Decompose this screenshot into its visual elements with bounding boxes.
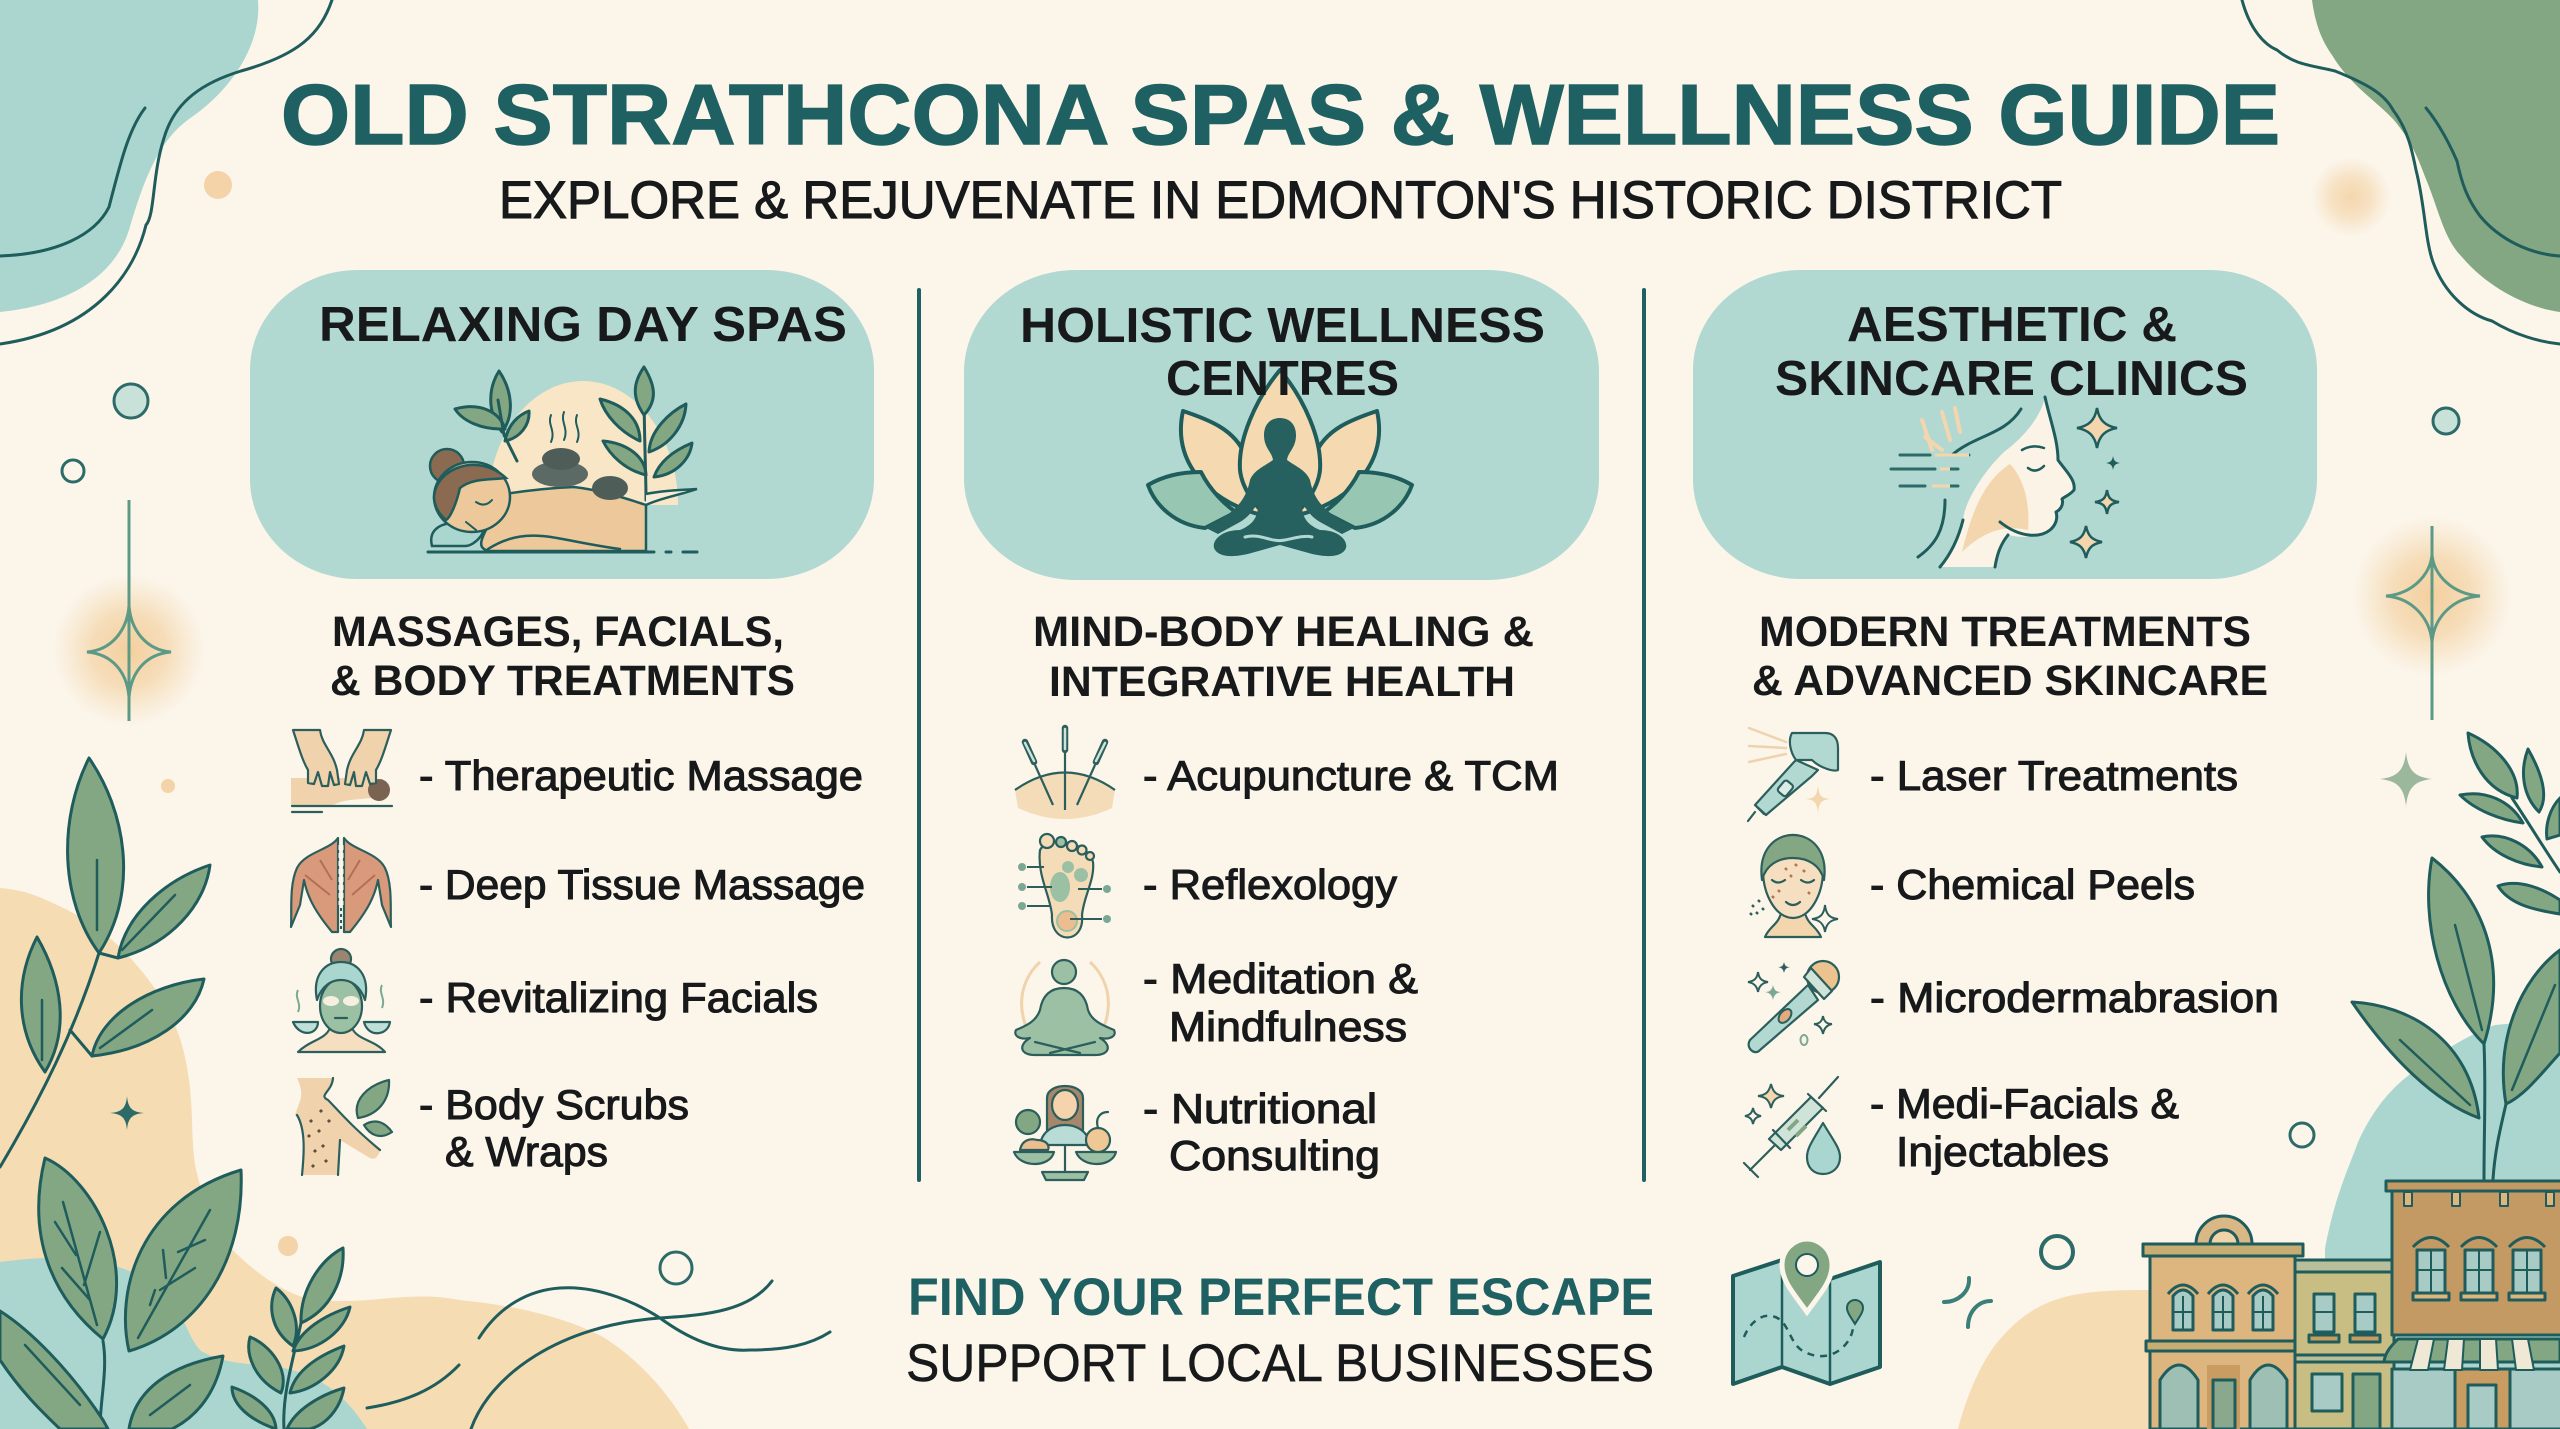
list item: deep tissue massage: - Deep Tissue Massage (419, 861, 865, 908)
list item: therapeutic massage: - Therapeutic Massage (419, 752, 863, 799)
heading: HOLISTIC WELLNESS (1020, 299, 1545, 353)
footer call to action: FIND YOUR PERFECT ESCAPE (908, 1268, 1654, 1327)
icon: profile face with sparkles (1891, 397, 2120, 567)
list item: therapeutic massage (291, 730, 863, 812)
list item: acupuncture: - Acupuncture & TCM (1143, 752, 1559, 799)
building left (2143, 1216, 2303, 1429)
subheading (1033, 608, 1534, 706)
icon: back muscles (291, 838, 391, 932)
panel: aesthetic and skincare clinics (1693, 270, 2317, 1177)
subheading: MASSAGES, FACIALS, (332, 608, 784, 656)
building right (2384, 1181, 2560, 1429)
icon: meditating figure (1015, 960, 1115, 1055)
list item: deep tissue massage (291, 838, 865, 932)
subheading: MODERN TREATMENTS (1759, 608, 2251, 656)
list item: microdermabrasion: - Microdermabrasion (1870, 974, 2279, 1021)
upper right sprig (2460, 733, 2560, 914)
branch of leaves (0, 758, 210, 1167)
panel background (964, 270, 1599, 580)
subheading: & BODY TREATMENTS (330, 657, 795, 705)
icon: person on massage table with hot stones (428, 367, 697, 552)
list item: nutritional consulting (1014, 1085, 1380, 1180)
list item: chemical peels (1750, 835, 2195, 937)
heading: RELAXING DAY SPAS (319, 298, 847, 352)
building middle (2295, 1260, 2394, 1429)
heading: SKINCARE CLINICS (1775, 352, 2248, 406)
icon: reflexology foot (1018, 834, 1111, 938)
list item: body scrubs and wraps: & Wraps (445, 1128, 608, 1175)
heading: AESTHETIC & (1847, 298, 2177, 352)
top-right decoration (2242, 0, 2560, 434)
title: OLD STRATHCONA SPAS & WELLNESS GUIDE (281, 68, 2280, 163)
list item: body scrubs and wraps (295, 1078, 689, 1175)
list item: laser treatments (1748, 728, 2238, 821)
list item: medi-facials and injectables (1744, 1077, 2179, 1177)
icon: nutrition scale with person (1014, 1086, 1116, 1180)
list item: reflexology (1018, 834, 1397, 938)
large lower leaves (0, 1158, 241, 1429)
bottom-left decoration (0, 758, 830, 1429)
list item: reflexology: - Reflexology (1143, 861, 1397, 908)
top-left decoration (0, 0, 332, 482)
panel background (250, 270, 874, 579)
right sparkle with glow (2352, 516, 2512, 720)
list item: laser treatments: - Laser Treatments (1870, 752, 2238, 799)
icon: acupuncture needles (1015, 728, 1115, 819)
icon: body scrub with leaves (295, 1078, 392, 1175)
subheading (330, 608, 795, 705)
icon: syringe and drop (1744, 1077, 1840, 1177)
heading: CENTRES (1166, 352, 1399, 406)
icon: lotus with meditating figure (1148, 370, 1412, 556)
column dividers (917, 288, 1646, 1182)
panel background (1693, 270, 2317, 579)
icon: laser device (1748, 728, 1838, 821)
list item: medi-facials and injectables: Injectables (1896, 1128, 2109, 1175)
icon: map with location pin (1733, 1239, 1880, 1384)
bottom-right decoration (1944, 733, 2560, 1429)
icon: facial mask (293, 949, 390, 1052)
icon: face with peel (1750, 835, 1838, 937)
subheading (1752, 608, 2268, 705)
list item: meditation (1015, 955, 1418, 1055)
footer call to action (906, 1268, 1654, 1393)
icon: massage hands (291, 730, 392, 812)
list item: acupuncture (1015, 728, 1559, 819)
historic buildings (2143, 1181, 2560, 1429)
list item: microdermabrasion (1748, 961, 2279, 1052)
subheading: & ADVANCED SKINCARE (1752, 657, 2268, 705)
list item: nutritional consulting: Consulting (1169, 1132, 1380, 1179)
heading (1020, 299, 1545, 406)
subtitle: EXPLORE & REJUVENATE IN EDMONTON'S HISTORIC DISTRICT (499, 171, 2062, 230)
icon: microdermabrasion wand (1748, 961, 1839, 1052)
list item: body scrubs and wraps: - Body Scrubs (419, 1081, 689, 1128)
small plant (232, 1248, 350, 1429)
list item: nutritional consulting: - Nutritional (1143, 1085, 1377, 1132)
list item: revitalizing facials (293, 949, 818, 1052)
list item: revitalizing facials: - Revitalizing Facials (419, 974, 818, 1021)
panel: relaxing day spas (250, 270, 874, 1175)
subheading: INTEGRATIVE HEALTH (1049, 658, 1515, 706)
list item: chemical peels: - Chemical Peels (1870, 861, 2195, 908)
list item: medi-facials and injectables: - Medi-Facials & (1870, 1080, 2179, 1127)
large right plant (2352, 858, 2560, 1179)
heading (1775, 298, 2248, 406)
list item: meditation: - Meditation & (1143, 955, 1418, 1002)
list item: meditation: Mindfulness (1169, 1003, 1407, 1050)
panel: holistic wellness centres (964, 270, 1599, 1180)
subheading: MIND-BODY HEALING & (1033, 608, 1534, 656)
left sparkle with glow (53, 500, 205, 726)
footer call to action: SUPPORT LOCAL BUSINESSES (906, 1334, 1654, 1393)
